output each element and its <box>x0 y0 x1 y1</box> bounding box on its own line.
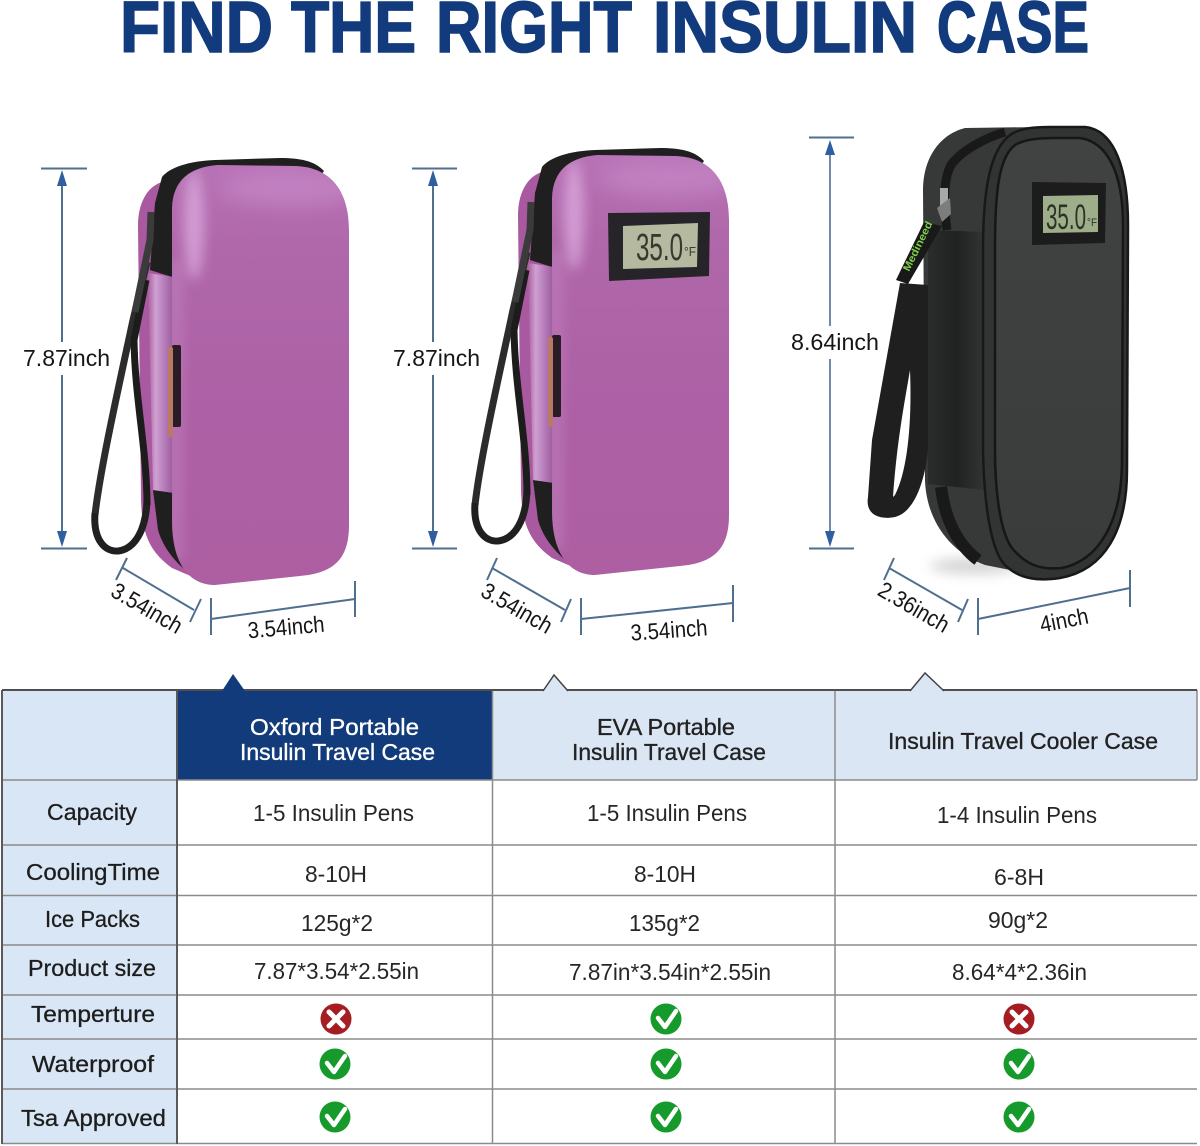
row labels: Capacity <box>47 799 138 825</box>
dimension: eva depth: 3.54inch <box>477 577 557 639</box>
case back lobe <box>138 182 200 580</box>
inner fabric panel <box>995 138 1123 568</box>
zipper tag with brand <box>896 220 942 284</box>
table backgrounds <box>2 690 1197 1144</box>
lower zipper <box>941 487 978 560</box>
case back body <box>923 127 1050 578</box>
zipper band <box>150 158 324 583</box>
column values: cooler <box>937 802 1097 985</box>
dimension: eva height: 7.87inch <box>393 345 480 371</box>
icon: cross oxford temperature <box>320 1004 352 1034</box>
dimension: oxford width <box>211 581 355 643</box>
side pocket <box>148 273 174 493</box>
column values: cooler: 90g*2 <box>988 907 1048 933</box>
icon: check oxford waterproof <box>320 1048 350 1080</box>
side pocket <box>928 230 985 490</box>
icon: lcd thermometer on eva case <box>608 212 710 281</box>
zipper slider <box>937 188 951 222</box>
dimension: eva height <box>393 168 480 548</box>
column values: cooler: 6-8H <box>994 864 1044 890</box>
wrist strap <box>95 262 147 551</box>
dimension: oxford depth <box>107 558 201 639</box>
icon: lcd thermometer on eva case: 35.0 <box>636 227 683 269</box>
column values: eva: 7.87in*3.54in*2.55in <box>569 959 771 985</box>
row labels: CoolingTime <box>26 859 160 885</box>
side tab <box>548 335 561 427</box>
icon: lcd thermometer on cooler case: 35.0 <box>1046 198 1086 237</box>
header: eva: EVA Portable <box>597 714 735 740</box>
column values: oxford: 7.87*3.54*2.55in <box>254 958 419 984</box>
panel: insulin travel cooler case product <box>868 127 1128 579</box>
zipper tag with brand: Medineed <box>901 220 935 273</box>
header: oxford <box>240 714 435 765</box>
row labels: Ice Packs <box>45 906 140 932</box>
dimension: oxford width: 3.54inch <box>247 611 325 643</box>
side tab <box>168 345 181 437</box>
dimension: cooler height: 8.64inch <box>791 329 879 355</box>
table grid <box>2 690 1197 1144</box>
zipper band <box>530 148 704 573</box>
dimension: cooler depth <box>874 558 968 638</box>
zipper pull <box>135 212 151 312</box>
case front face <box>550 150 740 578</box>
column values: oxford <box>253 800 419 984</box>
case back lobe <box>518 172 580 570</box>
icon: check cooler tsa <box>1004 1102 1034 1132</box>
dimension: eva width <box>581 585 733 646</box>
row labels: Temperture <box>31 1001 155 1027</box>
header: cooler: Insulin Travel Cooler Case <box>888 728 1158 754</box>
column values: oxford: 125g*2 <box>301 910 373 936</box>
icon: check eva temperature <box>650 1004 682 1034</box>
case front face <box>170 160 360 588</box>
upper zipper <box>945 132 1005 230</box>
row labels: Tsa Approved <box>21 1105 166 1131</box>
dimension: cooler width: 4inch <box>1037 603 1091 637</box>
icon: lcd thermometer on eva case: °F <box>684 244 696 259</box>
panel: eva case product <box>475 148 740 578</box>
header: eva: Insulin Travel Case <box>572 739 766 765</box>
soft shadow <box>930 558 1020 574</box>
column values: eva: 1-5 Insulin Pens <box>587 800 747 826</box>
header pointer: eva <box>543 675 568 691</box>
icon: check eva tsa <box>650 1102 682 1132</box>
icon: check eva waterproof <box>650 1048 682 1080</box>
comparison table <box>2 673 1197 1144</box>
title <box>120 0 1089 68</box>
icon: cross cooler temperature <box>1004 1004 1034 1034</box>
icon: lcd thermometer on cooler case <box>1032 182 1106 245</box>
icon: check oxford tsa <box>320 1102 350 1132</box>
wrist strap <box>868 283 928 518</box>
column values: eva: 135g*2 <box>629 910 700 936</box>
column values: eva: 8-10H <box>634 861 696 887</box>
header: eva <box>572 714 766 765</box>
dimension: eva depth <box>477 558 571 639</box>
dimension: cooler width <box>978 570 1130 637</box>
case front face <box>983 127 1128 579</box>
dimension: oxford height: 7.87inch <box>23 345 110 371</box>
icon: lcd thermometer on cooler case: °F <box>1087 217 1097 229</box>
side pocket <box>528 263 554 483</box>
dimension: eva width: 3.54inch <box>630 614 708 646</box>
row labels: Product size <box>28 955 156 981</box>
column values: oxford: 1-5 Insulin Pens <box>253 800 414 826</box>
wrist strap <box>475 252 527 541</box>
column values: cooler: 8.64*4*2.36in <box>952 959 1087 985</box>
row labels <box>21 799 166 1131</box>
header: oxford: Oxford Portable <box>250 714 419 740</box>
row labels: Waterproof <box>32 1051 155 1077</box>
column values: eva <box>569 800 771 985</box>
dimension: oxford height <box>23 168 110 548</box>
header pointer: cooler <box>910 673 944 691</box>
header pointer: oxford <box>222 674 245 691</box>
header: oxford: Insulin Travel Case <box>240 739 435 765</box>
icon: check cooler waterproof <box>1004 1048 1034 1080</box>
panel: oxford case product <box>95 158 360 588</box>
column values: oxford: 8-10H <box>305 861 367 887</box>
zipper pull <box>515 202 531 302</box>
dimension: cooler depth: 2.36inch <box>874 576 954 638</box>
column values: cooler: 1-4 Insulin Pens <box>937 802 1097 828</box>
dimension: oxford depth: 3.54inch <box>107 577 187 639</box>
dimension: cooler height <box>791 138 879 548</box>
